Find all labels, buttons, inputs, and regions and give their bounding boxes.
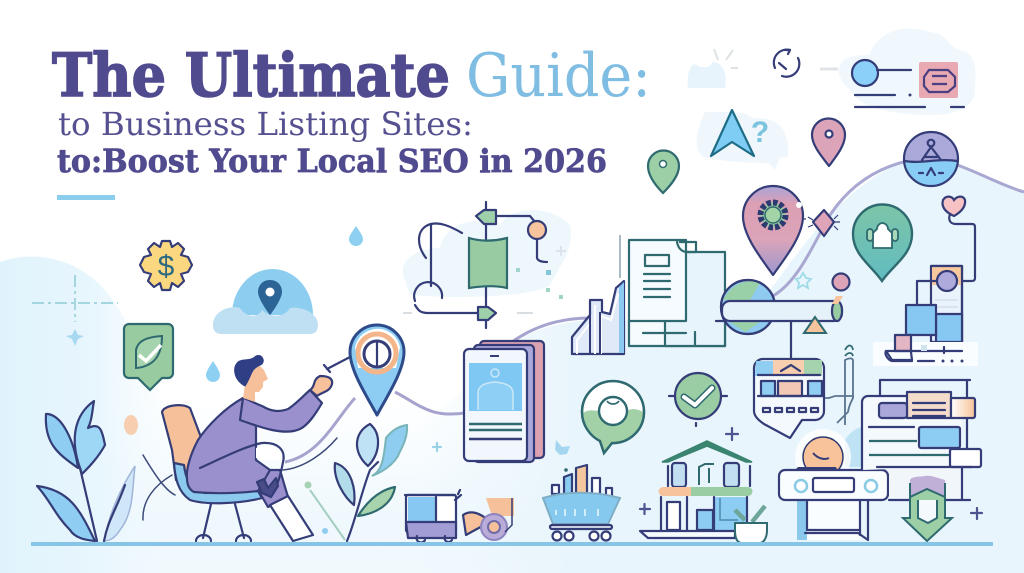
icon: antenna lamp — [825, 346, 853, 425]
icon: right side dashboard panel — [862, 380, 981, 500]
hand — [310, 376, 332, 396]
icon: pink pin — [812, 118, 845, 166]
icon: cross markers — [433, 428, 982, 519]
bent knee — [200, 443, 284, 488]
icon: small star shape — [555, 440, 570, 455]
icon: green check badge — [124, 324, 173, 390]
lower leg and sock — [258, 470, 313, 541]
pale cloud backdrop — [403, 210, 571, 297]
icon: boat tray — [873, 335, 978, 366]
icon: sparkling diamond — [804, 210, 840, 236]
icon: green speech pin — [582, 381, 644, 453]
neck and face — [243, 364, 268, 402]
icon: navigation arrow: ? — [751, 116, 769, 149]
icon: teal people pin — [853, 204, 912, 281]
icon: dollar gear: $ — [158, 250, 175, 283]
icon: peach panel bubble — [754, 359, 824, 438]
icon: refresh — [774, 50, 799, 77]
subtitle line one: to Business Listing Sites: — [58, 105, 473, 143]
icon: navigation arrow — [697, 110, 788, 170]
character: person on chair — [162, 356, 350, 541]
icon: globe seesaw — [716, 273, 850, 358]
subtitle line two: to:Boost Your Local SEO in 2026 — [57, 142, 607, 180]
arm — [240, 390, 322, 432]
icon: large gear pin — [743, 186, 803, 275]
flow line curves — [285, 158, 1024, 462]
plant: left — [37, 401, 135, 541]
icon: green pin — [648, 150, 679, 193]
icon: heart with wire — [942, 197, 975, 281]
title — [52, 41, 651, 200]
icon: server stack — [906, 266, 962, 342]
torso and thigh — [187, 398, 270, 493]
decorative thin curves — [143, 438, 337, 520]
icon: dollar gear — [140, 241, 192, 290]
shoe — [257, 478, 278, 497]
icon: check circle — [669, 373, 727, 426]
icon: control unit — [779, 427, 888, 540]
icon: faint cloud with sparks — [688, 49, 738, 88]
icon: cloud location — [213, 269, 318, 334]
icon: small truck — [405, 490, 461, 542]
icon: flow diagram — [403, 202, 571, 328]
pointer stick — [324, 357, 350, 372]
icon: main location pin — [350, 325, 404, 415]
icon: crosshair — [32, 275, 118, 346]
panel: top right cloud card — [820, 29, 976, 115]
icon: shopping cart — [543, 465, 620, 540]
ground line — [31, 542, 993, 546]
icon: green down arrow — [903, 476, 952, 541]
icon: house storefront — [640, 441, 767, 543]
icon: phone with pages — [464, 341, 544, 462]
icon: bar chart shards — [572, 235, 624, 354]
icon: water drop — [349, 226, 363, 246]
icon: document stack — [629, 240, 725, 346]
chair — [162, 405, 262, 541]
icon: small droplet — [206, 361, 220, 382]
accent underline — [57, 195, 115, 200]
heading: Guide: Guide: — [466, 41, 651, 111]
white knee area — [256, 446, 282, 460]
heading: The Ultimate: The Ultimate — [52, 41, 450, 111]
icon: peach token — [124, 415, 138, 435]
icon: cut wheel — [463, 498, 514, 540]
icon: compass circle — [904, 132, 958, 187]
hair — [235, 356, 263, 386]
plant: center — [304, 424, 407, 541]
